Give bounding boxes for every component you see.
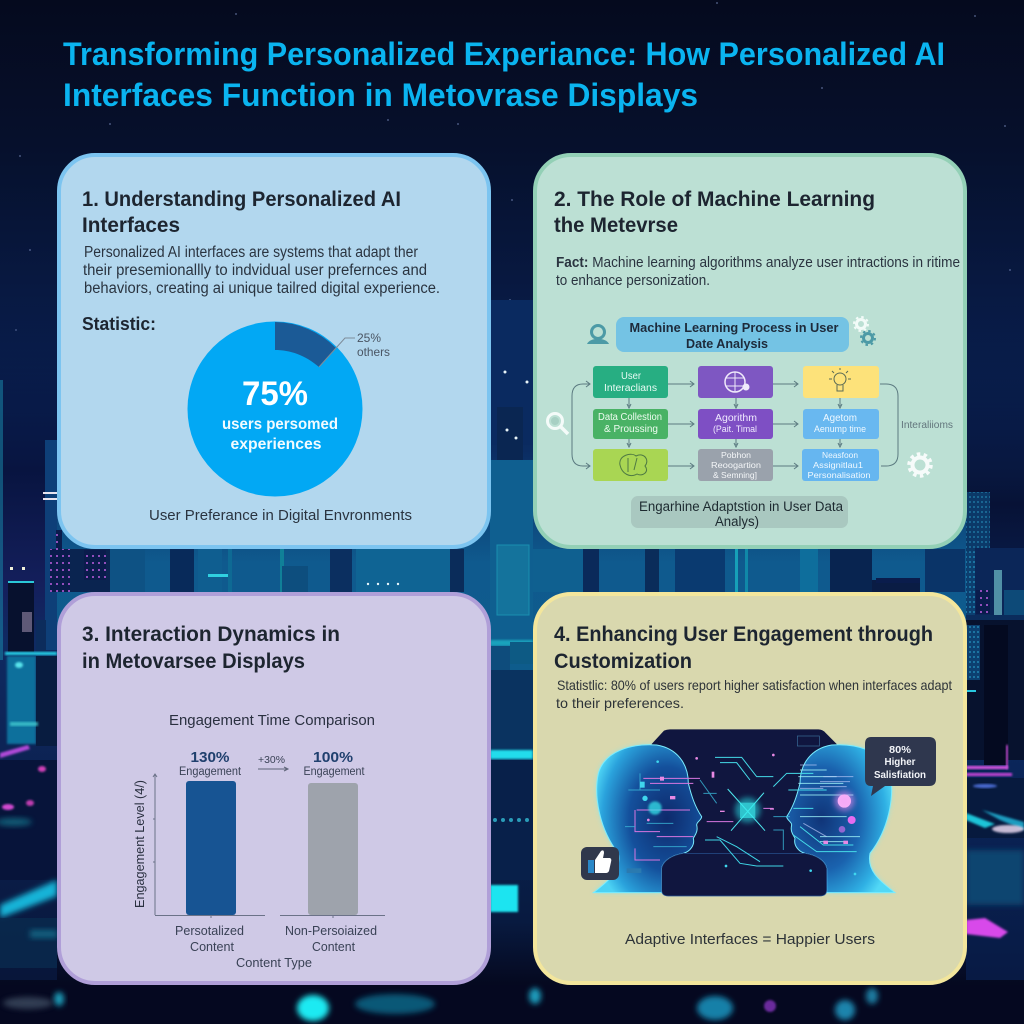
heading: 1. Understanding Personalized AI <box>82 187 401 211</box>
flow step: personalisation: Assignitlau1 <box>813 460 863 470</box>
flow step: personalisation: Personalisation <box>808 470 871 480</box>
bottom blurred lights <box>0 985 1024 1024</box>
illustration caption: Adaptive Interfaces = Happier Users <box>625 931 875 948</box>
bar chart: engagement time comparison: Engagement Time Comparison <box>169 713 375 729</box>
pie chart: 25% <box>357 331 381 345</box>
heading <box>554 622 933 673</box>
flow step: algorithm <box>698 409 773 439</box>
panel: interaction dynamics <box>59 594 489 983</box>
flow step: data collection: & Proussing <box>604 424 658 435</box>
bar chart: engagement time comparison: Engagement <box>179 766 242 778</box>
pie chart: users persomed <box>222 416 338 433</box>
pie chart <box>188 322 390 496</box>
flow step: algorithm adaptation: Agetom <box>823 413 857 424</box>
center gap <box>490 300 533 445</box>
bar chart: engagement time comparison: Content <box>312 940 356 954</box>
flow step: brain gear <box>698 366 773 398</box>
heading <box>82 622 340 673</box>
flow step: algorithm: Agorithm <box>715 413 757 424</box>
callout: 80% higher satisfaction <box>865 737 936 796</box>
bar chart: engagement time comparison: +30% <box>258 754 285 766</box>
flow step: pattern recognition: Reoogartion <box>711 460 761 470</box>
process diagram header: Machine Learning Process in User <box>630 320 838 335</box>
callout: 80% higher satisfaction: Salisfiation <box>874 769 926 781</box>
panel: role of machine learning <box>535 155 965 547</box>
icon: gear <box>909 454 931 476</box>
flow step: personalisation <box>802 449 879 481</box>
title: Interfaces Function in Metovrase Displays <box>63 77 698 113</box>
heading <box>82 187 401 237</box>
chart caption: User Preferance in Digital Envronments <box>149 507 412 524</box>
flow step: data collection: Data Collestion <box>598 412 662 423</box>
bar chart: engagement time comparison: Engagement Level (4/) <box>132 780 147 908</box>
panel: enhancing user engagement <box>535 594 965 983</box>
fact text: to enhance personization. <box>556 273 710 289</box>
heading: 3. Interaction Dynamics in <box>82 622 340 646</box>
flow step: algorithm adaptation <box>803 409 879 439</box>
bar chart: engagement time comparison: 100% <box>313 750 353 766</box>
icon: magnifier <box>548 414 568 434</box>
body text <box>83 244 440 297</box>
bar chart: engagement time comparison: Non-Persoiaized <box>285 924 377 938</box>
title <box>63 36 945 113</box>
flow step: user interactions: User <box>621 371 642 382</box>
flow step: personalisation: Neasfoon <box>822 450 858 460</box>
bar chart: engagement time comparison: Content Type <box>236 956 312 970</box>
panel: understanding personalized AI interfaces <box>59 155 489 547</box>
body text: their presemionallly to indvidual user prefernces and <box>83 262 427 279</box>
flow step: lightbulb <box>803 366 879 398</box>
heading: Interfaces <box>82 213 180 237</box>
pie chart: others <box>357 345 390 359</box>
flow step: algorithm: (Pait. Timal <box>713 424 757 434</box>
process diagram header <box>616 317 849 352</box>
diagram footer: Engarhine Adaptstion in User Data <box>639 499 843 514</box>
flow step: data collection <box>593 409 668 439</box>
flow step: user interactions: Interaclians <box>604 383 657 394</box>
flow step: pattern recognition: & Semning] <box>713 470 757 480</box>
icon: thumbs up <box>581 847 619 880</box>
pie chart: experiences <box>230 436 322 453</box>
side label: Interaliioms <box>901 419 953 431</box>
flow arrows <box>572 381 898 469</box>
bar chart: engagement time comparison: Engagement <box>304 766 365 778</box>
illustration: two AI heads facing each other <box>593 729 895 896</box>
heading <box>554 187 875 237</box>
heading: 2. The Role of Machine Learning <box>554 187 875 211</box>
icon: user <box>587 326 609 344</box>
flow step: brain <box>593 449 668 481</box>
heading: Customization <box>554 649 692 673</box>
icon: gears <box>854 317 875 345</box>
heading: 4. Enhancing User Engagement through <box>554 622 933 646</box>
statistic text: Statistlic: 80% of users report higher satisfaction when interfaces adapt <box>557 677 952 693</box>
heading: the Metevrse <box>554 213 678 237</box>
fact text: Fact: Machine learning algorithms analyze user intractions in ritime <box>556 255 960 271</box>
heading: in Metovarsee Displays <box>82 649 305 673</box>
left strip <box>0 300 57 980</box>
process diagram header: Date Analysis <box>686 336 768 351</box>
diagram footer <box>631 496 848 529</box>
body text: Personalized AI interfaces are systems that adapt ther <box>84 244 418 261</box>
pie chart: 75% <box>242 375 308 413</box>
statistic label: Statistic: <box>82 313 156 334</box>
flow step: algorithm adaptation: Aenump time <box>814 424 866 435</box>
flow step: pattern recognition: Pobhon <box>721 450 751 460</box>
statistic text <box>556 677 952 711</box>
flow step: user interactions <box>593 366 668 398</box>
bar chart: engagement time comparison <box>132 713 385 970</box>
bar chart: engagement time comparison: Content <box>190 940 235 954</box>
body text: behaviors, creating ai unique tailred digital experience. <box>84 280 440 297</box>
bar chart: engagement time comparison: 130% <box>190 750 230 766</box>
right strip <box>966 300 1024 980</box>
horizontal gap buildings <box>50 549 70 592</box>
flow step: pattern recognition <box>698 449 773 481</box>
bar chart: engagement time comparison: Persotalized <box>175 924 244 938</box>
statistic text: to their preferences. <box>556 695 684 711</box>
diagram footer: Analys) <box>715 514 759 529</box>
title: Transforming Personalized Experiance: How Personalized AI <box>63 36 945 72</box>
callout: 80% higher satisfaction: Higher <box>884 756 916 768</box>
callout: 80% higher satisfaction: 80% <box>889 744 912 756</box>
fact text <box>556 255 960 289</box>
